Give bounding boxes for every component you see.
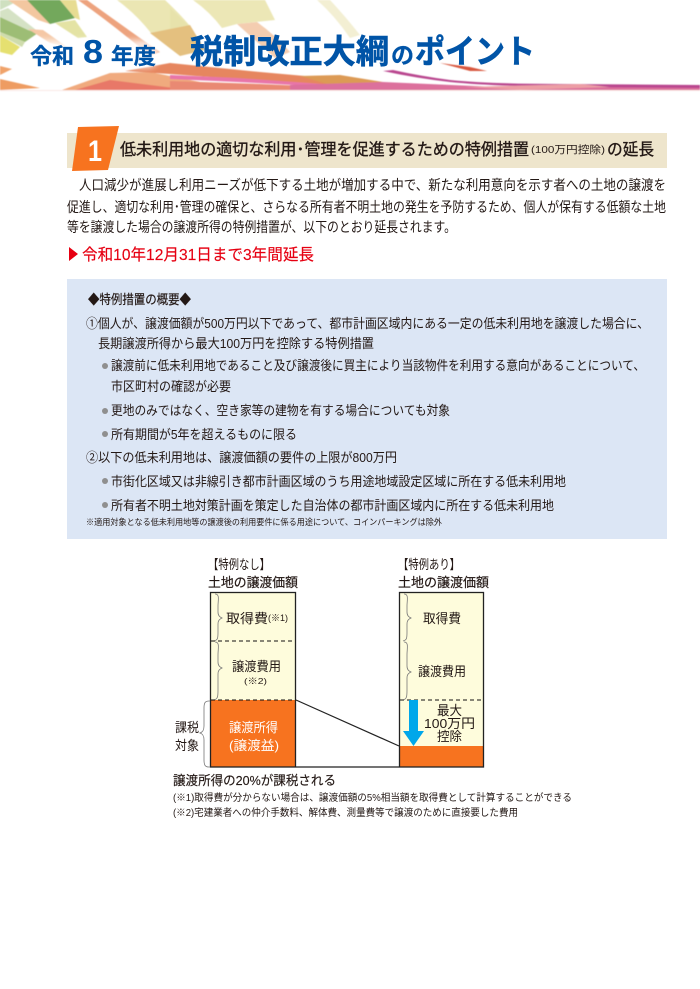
column: without special measure: 【特例なし】: [208, 557, 270, 572]
title glow: [28, 40, 158, 68]
title: main: 税制改正大綱: [190, 33, 389, 70]
column: with special measure: 控除: [437, 729, 462, 744]
taxable bracket label: 課税: [175, 720, 199, 735]
item 1 bullets: 更地のみではなく、空き家等の建物を有する場合についても対象: [111, 402, 450, 418]
intro paragraph: [67, 177, 666, 235]
heading text: の延長: [607, 140, 654, 159]
number badge: [72, 126, 119, 171]
title: no: の: [391, 42, 414, 68]
title: nendo: 年度: [111, 44, 156, 69]
column: with special measure: 100万円: [424, 716, 475, 731]
item 1: 長期譲渡所得から最大100万円を控除する特例措置: [98, 335, 374, 351]
column: without special measure: 土地の譲渡価額: [208, 575, 298, 590]
item 1: [86, 316, 649, 351]
section heading band: [67, 126, 667, 171]
title: point: ポイント: [415, 33, 535, 70]
intro paragraph: 等を譲渡した場合の譲渡所得の特例措置が、以下のとおり延長されます。: [67, 219, 456, 235]
panel: overview of special measure: [67, 279, 667, 539]
column: without special measure: (譲渡益): [229, 738, 279, 753]
extension deadline callout: 令和10年12月31日まで3年間延長: [82, 246, 314, 264]
column: without special measure: 譲渡所得: [229, 719, 278, 735]
title: reiwa: 令和: [30, 44, 74, 69]
column: without special measure: [208, 557, 298, 767]
item 1: ①個人が、譲渡価額が500万円以下であって、都市計画区域内にある一定の低未利用地を譲渡した場合に、: [86, 316, 649, 331]
panel heading: ◆特例措置の概要◆: [88, 292, 192, 307]
item 1 bullets: 市区町村の確認が必要: [111, 379, 231, 394]
footnotes: [173, 791, 572, 819]
footnotes: (※2)宅建業者への仲介手数料、解体費、測量費等で譲渡のために直接要した費用: [173, 806, 518, 819]
connecting lines: [296, 700, 399, 767]
item 2: ②以下の低未利用地は、譲渡価額の要件の上限が800万円: [86, 450, 397, 465]
taxable bracket label: [175, 701, 210, 767]
diagram: [175, 557, 489, 767]
icon: down arrow: [403, 700, 424, 746]
column: with special measure: 【特例あり】: [398, 557, 460, 572]
column: with special measure: 取得費: [423, 610, 461, 626]
title: [28, 33, 535, 70]
number badge: 1: [88, 135, 102, 168]
item 1 bullets: 所有期間が5年を超えるものに限る: [111, 427, 297, 442]
column: without special measure: (※1): [268, 613, 288, 623]
item 2 bullets: 所有者不明土地対策計画を策定した自治体の都市計画区域内に所在する低未利用地: [111, 497, 554, 513]
column: with special measure: 土地の譲渡価額: [398, 575, 489, 590]
column: without special measure: 譲渡費用: [232, 659, 281, 674]
footnotes: (※1)取得費が分からない場合は、譲渡価額の5%相当額を取得費として計算することができる: [173, 791, 572, 804]
header decorative banner: [0, 0, 700, 91]
item 2 bullets: [102, 474, 566, 513]
column: with special measure: [398, 557, 489, 767]
item 2 bullets: 市街化区域又は非線引き都市計画区域のうち用途地域設定区域に所在する低未利用地: [111, 474, 566, 489]
panel footnote: ※適用対象となる低未利用地等の譲渡後の利用要件に係る用途について、コインパーキングは除外: [86, 516, 442, 527]
heading text: (100万円控除): [531, 143, 605, 156]
title: year number: 8: [83, 33, 103, 70]
diagram note: 譲渡所得の20%が課税される: [173, 773, 336, 788]
column: with special measure: 譲渡費用: [418, 664, 466, 679]
column: without special measure: (※2): [244, 676, 267, 686]
column: without special measure: 取得費: [226, 610, 268, 626]
column: with special measure: 最大: [437, 703, 462, 718]
heading text: 低未利用地の適切な利用･管理を促進するための特例措置: [120, 140, 529, 159]
item 1 bullets: [102, 357, 645, 442]
item 1 bullets: 譲渡前に低未利用地であること及び譲渡後に買主により当該物件を利用する意向があることについて、: [111, 357, 645, 373]
taxable bracket label: 対象: [175, 738, 199, 753]
